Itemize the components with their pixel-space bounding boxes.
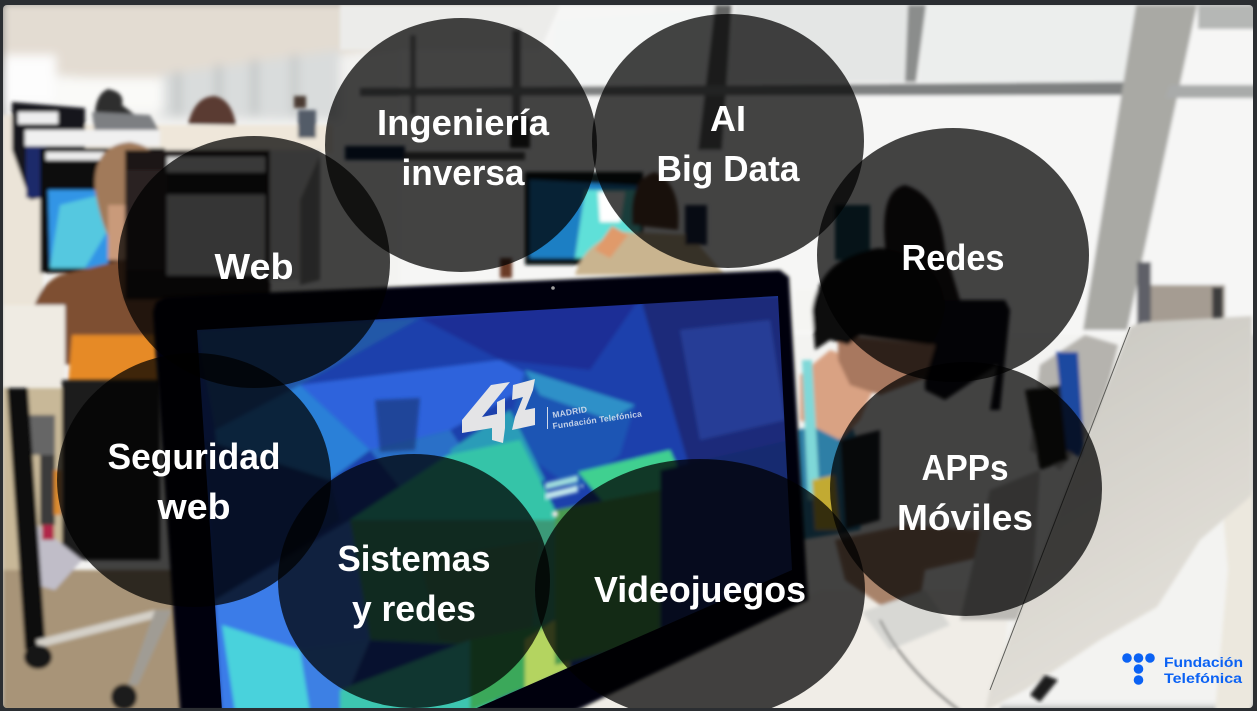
42 logo on screen bbox=[462, 379, 535, 443]
login form on screen bbox=[545, 475, 584, 517]
central background monitor and student bbox=[500, 172, 725, 278]
windows and columns on the right bbox=[340, 5, 1257, 335]
label: AI Big Data: AI bbox=[710, 98, 746, 139]
label: Seguridad web: Seguridad bbox=[108, 436, 280, 477]
label: Videojuegos: Videojuegos bbox=[594, 569, 806, 610]
far desks and people on the left bbox=[3, 89, 530, 388]
left foreground: table leg, chair and floor bbox=[3, 380, 183, 711]
logo wordmark bbox=[1164, 654, 1243, 686]
logo: Fundación Telefónica bbox=[1122, 653, 1243, 686]
monitor screen polygons bbox=[197, 296, 792, 708]
Madrid Fundación Telefónica screen text: MADRID bbox=[552, 404, 588, 420]
desk in front of right student bbox=[581, 596, 1006, 708]
label: Sistemas y redes: Sistemas bbox=[338, 538, 490, 579]
iMac stand bbox=[1215, 490, 1252, 711]
circle: AI Big Data bbox=[592, 14, 864, 268]
label: Sistemas y redes bbox=[338, 538, 490, 629]
label: AI Big Data bbox=[658, 106, 800, 188]
right student with lanyard and chair bbox=[795, 185, 1118, 711]
monitor bezel bbox=[153, 270, 808, 711]
label: Redes: Redes bbox=[902, 237, 1004, 278]
monitor camera bbox=[551, 286, 555, 290]
circle: Redes bbox=[817, 128, 1089, 382]
label: Seguridad web bbox=[108, 442, 278, 520]
label: APPs Móviles: APPs bbox=[922, 447, 1008, 488]
label: Ingeniería inversa: inversa bbox=[402, 152, 525, 193]
monitor reflection of a person bbox=[375, 398, 420, 452]
iMac back bbox=[985, 316, 1252, 711]
label: Ingeniería inversa bbox=[379, 108, 550, 186]
main monitor with 42 Madrid screen bbox=[153, 270, 860, 711]
logo divider on screen bbox=[547, 407, 548, 429]
label: Sistemas y redes: y redes bbox=[352, 588, 476, 629]
label: APPs Móviles bbox=[899, 455, 1032, 530]
Madrid Fundación Telefónica screen text: Fundación Telefónica bbox=[552, 409, 643, 431]
label: AI Big Data: Big Data bbox=[656, 148, 800, 189]
circle: Seguridad web bbox=[57, 353, 331, 607]
circle: APPs Móviles bbox=[830, 362, 1102, 616]
label: Web: Web bbox=[214, 246, 294, 287]
circle: Web bbox=[118, 136, 390, 388]
label: Seguridad web: web bbox=[156, 486, 230, 527]
circle: Ingeniería inversa bbox=[325, 18, 597, 272]
iMac cable connector bbox=[1030, 675, 1058, 702]
logo wordmark: Fundación bbox=[1164, 654, 1243, 670]
circle: Sistemas y redes bbox=[278, 454, 550, 708]
circle: Videojuegos bbox=[535, 459, 865, 711]
logo icon: blue dots bbox=[1122, 653, 1155, 685]
label: Ingeniería inversa: Ingeniería bbox=[377, 102, 550, 143]
logo wordmark: Telefónica bbox=[1164, 670, 1242, 686]
right foreground white iMac and desk bbox=[985, 316, 1252, 711]
iMac edge line bbox=[990, 327, 1130, 690]
label: APPs Móviles: Móviles bbox=[897, 497, 1033, 538]
